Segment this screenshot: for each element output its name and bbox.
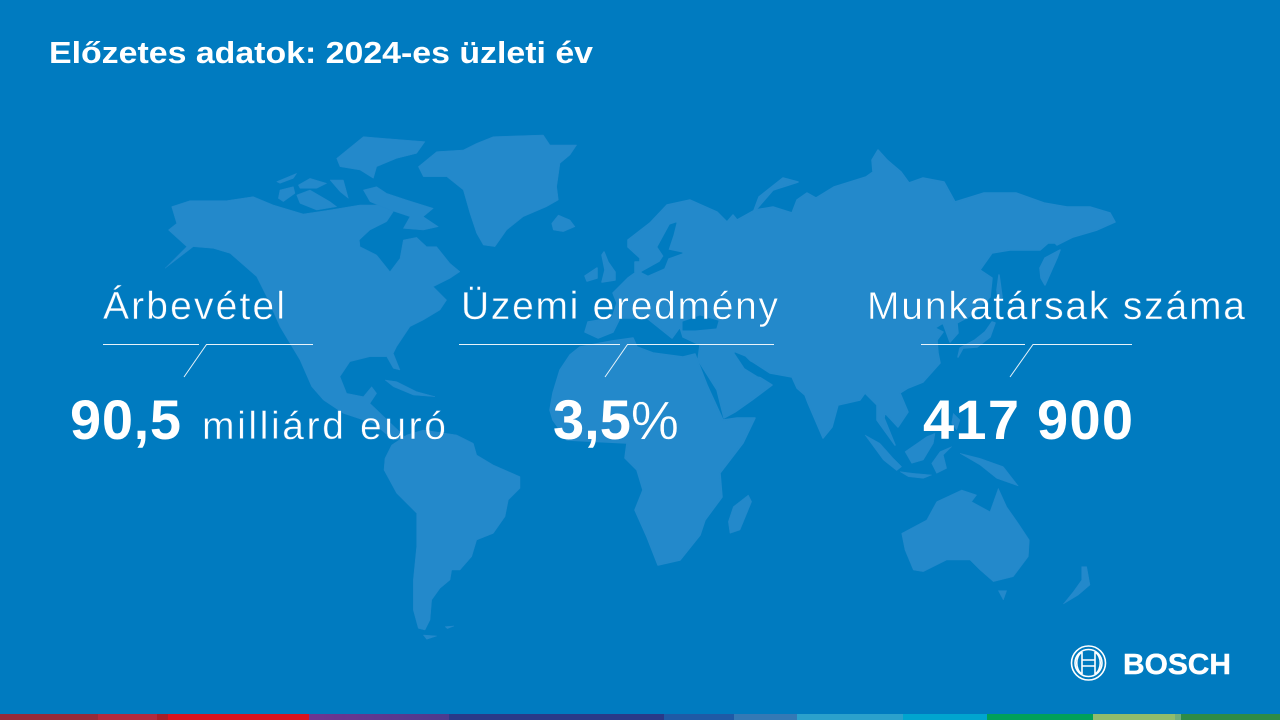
panel: operating result <box>459 285 778 451</box>
employees value: 417 900 <box>923 388 1133 451</box>
operating result callout line <box>459 344 774 377</box>
wordmark: BOSCH <box>1123 649 1231 681</box>
panel: revenue <box>70 285 446 451</box>
Kamchatka <box>1040 250 1060 285</box>
Africa <box>550 338 755 565</box>
operating result label: Üzemi eredmény <box>461 285 778 328</box>
Japan <box>958 322 995 357</box>
world map <box>165 135 1115 639</box>
Bosch logo <box>1072 646 1231 681</box>
revenue unit: milliárd euró <box>202 405 446 448</box>
revenue value: 90,5 <box>70 388 181 451</box>
title: Előzetes adatok: 2024-es üzleti év <box>49 35 594 70</box>
Novaya Zemlya <box>753 178 798 213</box>
operating result value: 3,5% <box>553 388 679 451</box>
Sakhalin <box>997 275 1002 300</box>
Britain <box>602 252 615 282</box>
revenue callout line <box>103 344 313 377</box>
colour bar <box>0 714 1280 720</box>
panel: employees <box>867 285 1245 451</box>
Eurasia <box>585 150 1115 445</box>
Ireland <box>585 268 597 281</box>
icon: Bosch armature <box>1072 646 1106 680</box>
inland seas <box>642 223 772 378</box>
employees callout line <box>921 344 1132 377</box>
employees label: Munkatársak száma <box>867 285 1245 328</box>
revenue label: Árbevétel <box>103 285 285 328</box>
